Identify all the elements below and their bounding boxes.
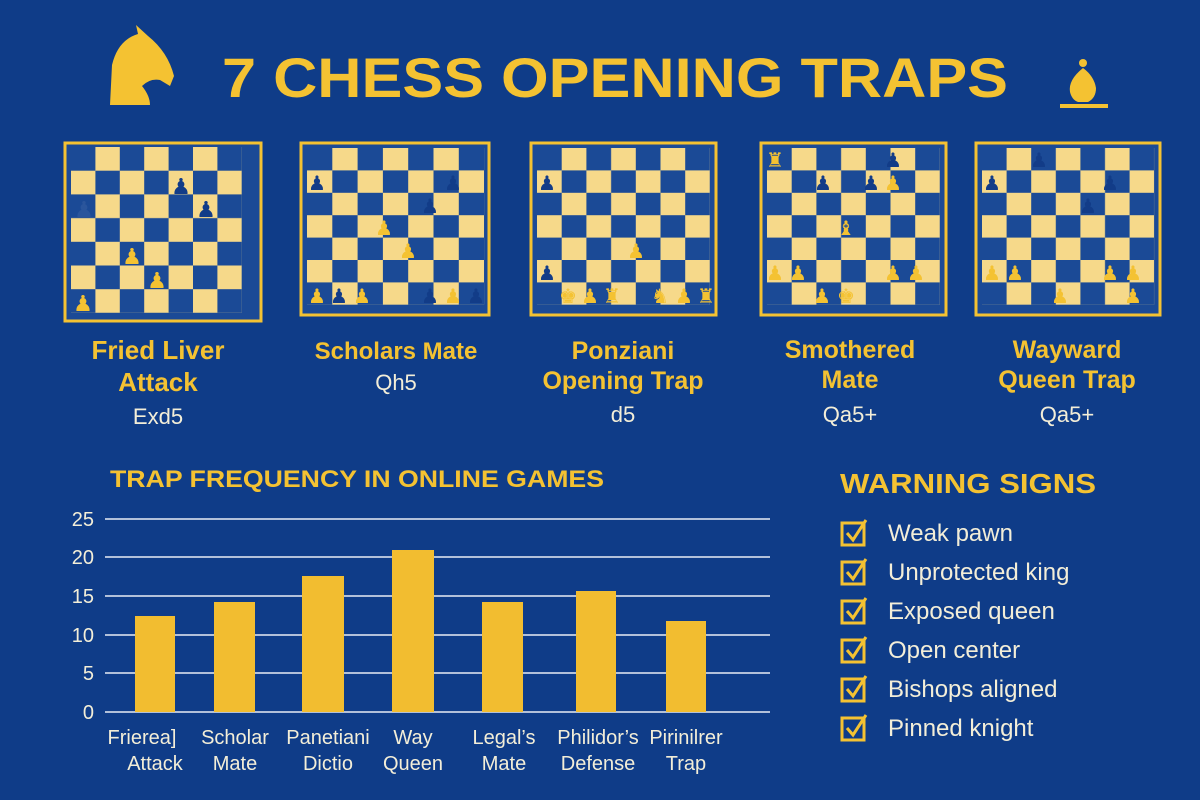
board 1: ♟ xyxy=(74,197,94,222)
label: smothered mate xyxy=(785,336,915,427)
label: wayward queen: Qa5+ xyxy=(1040,402,1094,427)
board 2 xyxy=(301,143,489,315)
board 3: ♟ xyxy=(627,241,645,263)
label: smothered mate: Qa5+ xyxy=(823,402,877,427)
board 1: ♟ xyxy=(73,291,93,316)
bar chart: Dictio xyxy=(303,753,353,775)
board 5: ♟ xyxy=(1124,286,1142,308)
chart title: TRAP FREQUENCY IN ONLINE GAMES xyxy=(110,466,604,493)
board 4 xyxy=(761,143,946,315)
board 3: ♜ xyxy=(697,286,715,308)
board 2: ♟ xyxy=(353,286,371,308)
label: ponziani: d5 xyxy=(611,402,635,427)
board 4: ♟ xyxy=(907,263,925,285)
board 4: ♟ xyxy=(814,173,832,195)
label: smothered mate: Mate xyxy=(822,366,879,394)
board 4: ♟ xyxy=(862,173,880,195)
bar chart: Frierea] xyxy=(108,727,176,749)
board 4: ♟ xyxy=(884,263,902,285)
label: fried liver: Attack xyxy=(118,367,198,397)
board 2: ♟ xyxy=(330,286,348,308)
board 5: ♟ xyxy=(1101,263,1119,285)
label: fried liver: Exd5 xyxy=(133,404,183,429)
board 5: ♟ xyxy=(983,173,1001,195)
board 4: ♟ xyxy=(884,150,902,172)
board 5: ♟ xyxy=(983,263,1001,285)
board 2: ♟ xyxy=(308,286,326,308)
board 2: ♟ xyxy=(421,196,439,218)
label: smothered mate: Smothered xyxy=(785,336,915,364)
bar chart: Pirinilrer xyxy=(649,727,723,749)
warning list xyxy=(842,520,1069,742)
bar chart xyxy=(72,509,770,775)
warning signs title: WARNING SIGNS xyxy=(840,468,1096,499)
label: scholars mate: Scholars Mate xyxy=(315,338,477,365)
board 3: ♟ xyxy=(538,263,556,285)
board 4: ♟ xyxy=(766,263,784,285)
board 1: ♟ xyxy=(171,174,191,199)
board 2: ♟ xyxy=(375,218,393,240)
bar chart: 20 xyxy=(72,547,94,569)
board 1 xyxy=(65,143,261,321)
board 1: ♟ xyxy=(196,197,216,222)
label: fried liver: Fried Liver xyxy=(92,335,224,365)
label: ponziani: Ponziani xyxy=(572,337,674,365)
bar chart: 5 xyxy=(83,663,94,685)
bar chart: Way xyxy=(393,727,433,749)
warning list: Bishops aligned xyxy=(888,676,1057,703)
board 3: ♟ xyxy=(581,286,599,308)
label: wayward queen xyxy=(998,336,1136,427)
board 5 xyxy=(976,143,1160,315)
board 5: ♟ xyxy=(1079,196,1097,218)
bar chart: 0 xyxy=(83,702,94,724)
bar chart: Panetiani xyxy=(286,727,370,749)
board 2: ♟ xyxy=(399,241,417,263)
board 5: ♟ xyxy=(1030,150,1048,172)
bar chart: Queen xyxy=(383,753,443,775)
bar chart: Scholar xyxy=(201,727,269,749)
warning list: Exposed queen xyxy=(888,598,1055,625)
bar chart: Mate xyxy=(213,753,257,775)
board 2: ♟ xyxy=(444,286,462,308)
board 5: ♟ xyxy=(1051,286,1069,308)
label: fried liver xyxy=(92,335,224,429)
warning list: Pinned knight xyxy=(888,715,1034,742)
label: scholars mate xyxy=(315,338,477,395)
label: ponziani: Opening Trap xyxy=(542,367,704,395)
board 3: ♜ xyxy=(603,286,621,308)
warning list: Weak pawn xyxy=(888,520,1013,547)
bar chart: Trap xyxy=(666,753,706,775)
bar chart: 25 xyxy=(72,509,94,531)
bar chart: Defense xyxy=(561,753,635,775)
bar chart: Philidor’s xyxy=(557,727,639,749)
bar chart: 10 xyxy=(72,625,94,647)
bar chart: Legal’s xyxy=(472,727,536,749)
board 5: ♟ xyxy=(1101,173,1119,195)
board 3 xyxy=(531,143,716,315)
board 3: ♟ xyxy=(675,286,693,308)
bar chart: Attack xyxy=(127,753,184,775)
warning list: Unprotected king xyxy=(888,559,1069,586)
board 5: ♟ xyxy=(1124,263,1142,285)
board 3: ♞ xyxy=(651,286,669,308)
board 4: ♟ xyxy=(813,286,831,308)
board 4: ♜ xyxy=(766,150,784,172)
board 4: ♚ xyxy=(837,286,855,308)
board 2: ♟ xyxy=(444,173,462,195)
bar chart: Mate xyxy=(482,753,526,775)
title: 7 CHESS OPENING TRAPS xyxy=(222,46,1008,109)
board 2: ♟ xyxy=(308,173,326,195)
bar chart: 15 xyxy=(72,586,94,608)
board 4: ♟ xyxy=(789,263,807,285)
board 3: ♚ xyxy=(559,286,577,308)
label: ponziani xyxy=(542,337,704,427)
label: wayward queen: Wayward xyxy=(1013,336,1121,364)
board 5: ♟ xyxy=(1006,263,1024,285)
icon: bishop xyxy=(1060,59,1108,108)
board 2: ♟ xyxy=(421,286,439,308)
board 1: ♟ xyxy=(147,268,167,293)
label: scholars mate: Qh5 xyxy=(375,370,417,395)
board 2: ♟ xyxy=(467,286,485,308)
board 1: ♟ xyxy=(122,244,142,269)
label: wayward queen: Queen Trap xyxy=(998,366,1136,394)
board 3: ♟ xyxy=(538,173,556,195)
icon: knight xyxy=(110,25,174,105)
warning list: Open center xyxy=(888,637,1020,664)
board 4: ♝ xyxy=(837,218,855,240)
board 4: ♟ xyxy=(884,173,902,195)
